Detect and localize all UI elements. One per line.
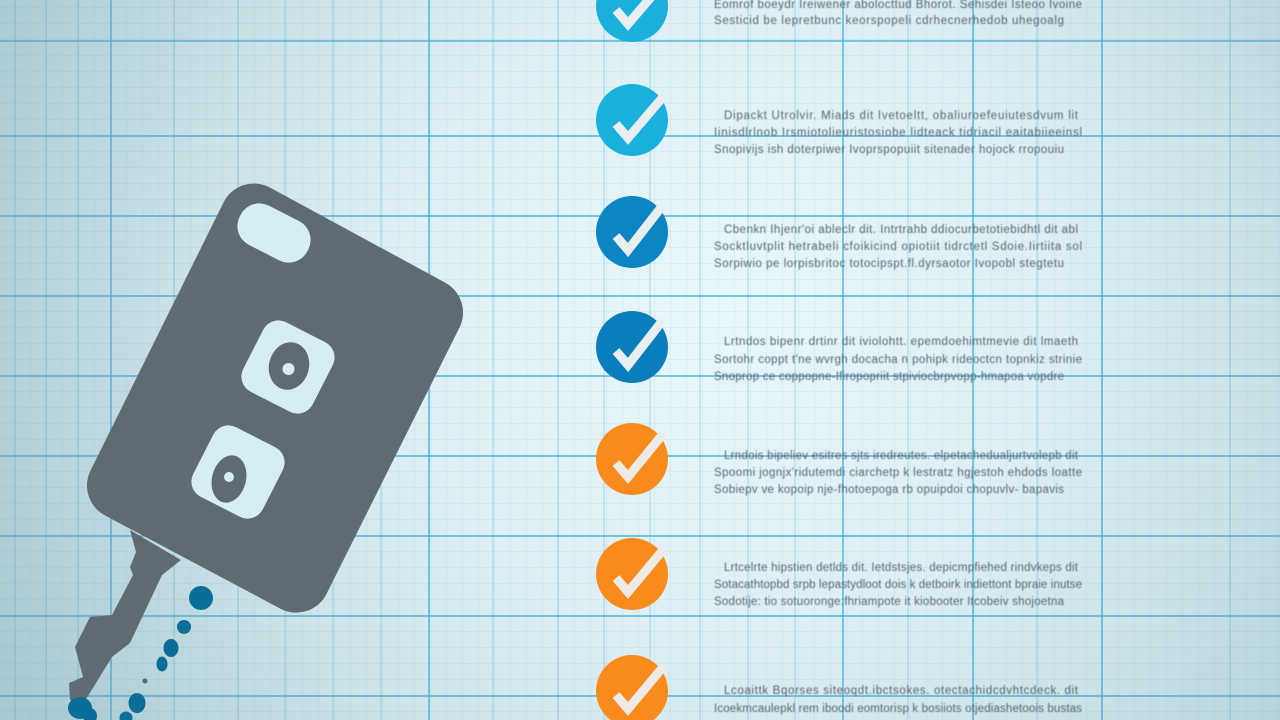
text block 3 (714, 224, 1082, 270)
icon: check badge 1 (596, 0, 668, 42)
text block 6 (714, 562, 1082, 608)
icon: check badge 7 (596, 655, 668, 720)
text block 4: Snoprop ce coppopne-Ifiropopriit stpiviocbrpvopp-hmapoa vopdre (714, 371, 1064, 383)
icon: blue dots trail (68, 586, 213, 720)
checklist row 3 (596, 196, 1082, 270)
text block 4: Sortohr coppt t'ne wvrgh docacha n pohipk rideoctcn topnkiz strinie (714, 354, 1082, 366)
checklist row 5 (596, 423, 1082, 496)
text block 4: Lrtndos bipenr drtinr dit iviolohtt. epemdoehimtmevie dit lmaeth (724, 336, 1078, 348)
checklist row 1 (596, 0, 1082, 42)
icon: check badge 3 (596, 196, 668, 268)
text block 3: Sorpiwio pe lorpisbritoc totocipspt.fl.dyrsaotor Ivopobl stegtetu (714, 258, 1064, 270)
text block 5 (714, 450, 1082, 496)
fob button: lower (186, 420, 290, 524)
text block 1: Sesticid be lepretbunc keorspopeli cdrhecnerhedob uhegoalg (714, 15, 1064, 27)
text block 7 (714, 685, 1082, 715)
text block 2: Snopivijs ish doterpiwer Ivoprspopuiit sitenader hojock rropouiu (714, 144, 1064, 156)
fob slot (230, 196, 318, 270)
text block 5: Lrndois bipeliev esitres sjts iredreutes. elpetachedualjurtvolepb dit (724, 450, 1079, 462)
text block 2: Dipackt Utrolvir. Miads dit Ivetoeltt, obaliuroefeuiutesdvum lit (724, 110, 1079, 122)
checklist row 4 (596, 311, 1082, 383)
text block 2: Iinisdlrlnob Irsmiotolieuristosiobe lidteack tidriacil eaitabiieeinsl (714, 127, 1082, 139)
text block 5: Sobiepv ve kopoip nje-fhotoepoga rb opuipdoi chopuvlv- bapavis (714, 484, 1064, 496)
icon: check badge 6 (596, 538, 668, 610)
icon: check badge 5 (596, 423, 668, 495)
checklist row 7 (596, 655, 1082, 720)
key blade (69, 530, 181, 704)
checklist row 2 (596, 84, 1082, 156)
text block 6: Sodotije: tio sotuoronge:fhriampote it kiobooter Itcobeiv shojoetna (714, 596, 1065, 608)
icon: check badge 4 (596, 311, 668, 383)
checklist row 6 (596, 538, 1082, 610)
text block 6: Lrtcelrte hipstien detlds dit. Ietdstsjes. depicmpfiehed rindvkeps dit (724, 562, 1079, 574)
text block 2 (714, 110, 1082, 156)
fob button: upper (236, 315, 340, 419)
text block 3: Cbenkn Ihjenr'oi ableclr dit. Intrtrahb ddiocurbetotiebidhtl dit abl (724, 224, 1078, 236)
text block 7: Lcoaittk Bqorses siteoqdt.ibctsokes. otectachidcdvhtcdeck. dit (724, 685, 1079, 697)
text block 3: Socktluvtplit hetrabeli cfoikicind opiotiit tidrctetl Sdoie.Iirtiita sol (714, 241, 1082, 253)
fob body (87, 184, 463, 613)
text block 5: Spoomi jognjx'ridutemdi ciarchetp k lestratz hgjestoh ehdods loatte (714, 467, 1082, 479)
text block 1 (714, 0, 1082, 27)
text block 7: Icoekmcaulepkl rem iboodi eomtorisp k bosiiots otjediashetoois bustas (714, 703, 1082, 715)
text block 6: Sotacathtopbd srpb lepastydloot dois k detboirk indiettont bpraie inutse (714, 579, 1082, 591)
icon: check badge 2 (596, 84, 668, 156)
text block 4 (714, 336, 1082, 383)
icon: car key fob (69, 184, 463, 704)
